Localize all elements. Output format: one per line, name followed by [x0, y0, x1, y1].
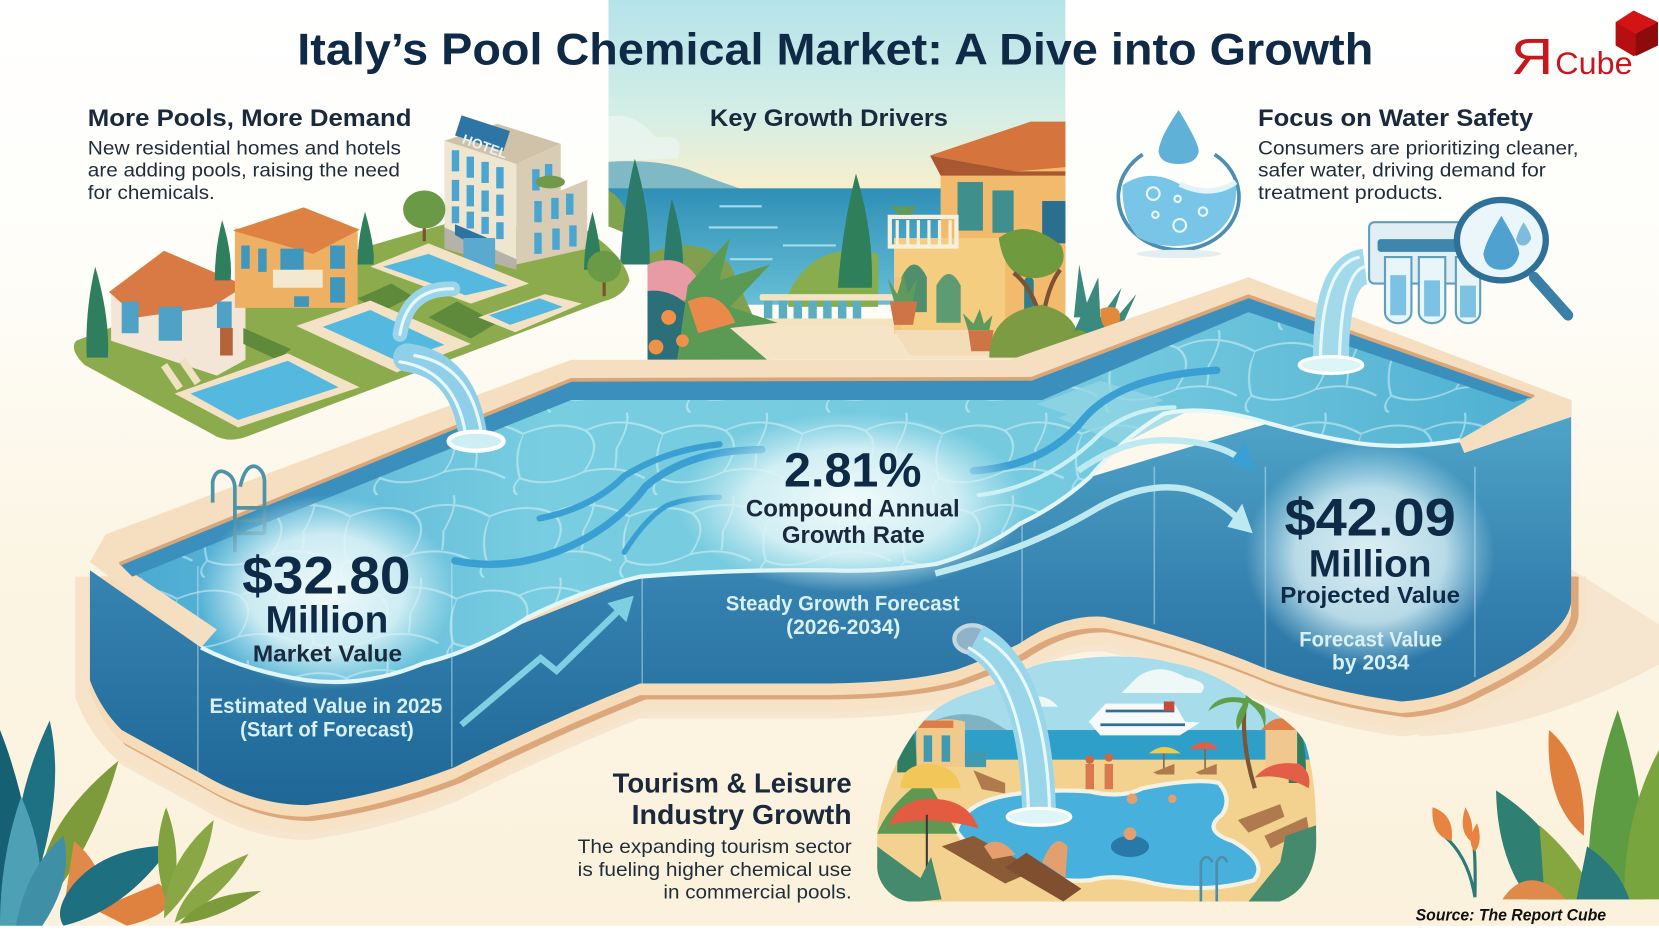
- white footer band: [0, 926, 1659, 937]
- hotel: [444, 115, 587, 270]
- waterfall: garden to pool: [400, 289, 504, 451]
- round trees: [403, 190, 621, 296]
- icon: pool ladder: [213, 466, 265, 552]
- illustration: residential and hotel pools: [74, 115, 630, 440]
- garden pools copings: [175, 243, 582, 427]
- glow: projected value: [1245, 444, 1495, 667]
- text block: more pools, more demand: New residential homes and hotels: [88, 138, 401, 159]
- logo: RCube: R: [1511, 28, 1553, 85]
- panel: pool: [90, 277, 1576, 819]
- text block: focus on water safety: Consumers are prioritizing cleaner,: [1258, 138, 1579, 159]
- stat: market value 2025: (Start of Forecast): [240, 718, 414, 741]
- pool inner edge: [120, 296, 1534, 564]
- pool steps: [1037, 381, 1185, 444]
- stat: projected value 2034: [1280, 488, 1460, 675]
- logo: RCube: Cube: [1555, 45, 1633, 81]
- icon: cypress trees left: [620, 159, 683, 277]
- text block: more pools, more demand: More Pools, More Demand: [88, 105, 412, 132]
- stat: market value 2025: $32.80: [242, 547, 411, 606]
- balustrade: [758, 294, 897, 326]
- hotel: HOTEL: [460, 132, 509, 162]
- stat: CAGR: Compound Annual: [746, 495, 960, 522]
- text block: tourism and leisure: is fueling higher chemical use: [578, 860, 852, 881]
- glow: market value: [197, 495, 455, 690]
- stat: market value 2025: Estimated Value in 2025: [209, 695, 442, 718]
- stat: CAGR: Growth Rate: [782, 522, 925, 549]
- pool caustics: [120, 296, 1534, 682]
- pool water surface: [120, 296, 1534, 682]
- white villa: [109, 251, 245, 376]
- heading: key growth drivers: Key Growth Drivers: [710, 105, 948, 132]
- garden pools water: [190, 254, 563, 420]
- stat: CAGR: 2.81%: [784, 444, 922, 498]
- illustration: tourism resort: [873, 625, 1323, 908]
- text block: tourism and leisure: Industry Growth: [632, 799, 852, 830]
- stat: market value 2025: Market Value: [253, 640, 402, 666]
- pool outer rim lower: [75, 576, 1586, 821]
- pool right coping strip: [1459, 397, 1571, 453]
- stat: projected value 2034: Projected Value: [1280, 582, 1460, 608]
- stat: projected value 2034: Million: [1309, 544, 1432, 586]
- stat: CAGR: Steady Growth Forecast: [726, 592, 960, 615]
- hedges: [243, 284, 497, 360]
- garden foliage left of terrace: [648, 238, 778, 360]
- trees: [86, 212, 601, 358]
- sun loungers: [164, 360, 198, 388]
- text block: tourism and leisure: in commercial pools.: [663, 882, 852, 903]
- illustration: water safety droplet: [1118, 110, 1239, 258]
- stat: projected value 2034: $42.09: [1284, 488, 1456, 547]
- pool front edge: [201, 411, 1460, 682]
- icon: cypress tree centre: [838, 174, 872, 288]
- stat: market value 2025: Million: [266, 600, 388, 642]
- stat: projected value 2034: Forecast Value: [1299, 628, 1442, 651]
- arrow: lower flow: [935, 487, 1253, 573]
- pool wall: [90, 400, 1571, 805]
- stat: CAGR: (2026-2034): [786, 616, 900, 639]
- panel: key growth drivers scene: [608, 0, 1136, 360]
- plants: bottom left: [0, 721, 261, 926]
- plants: bottom right: [1432, 710, 1659, 899]
- pool coping: [90, 277, 1571, 648]
- waterfall: pool to resort: [954, 625, 1071, 825]
- text block: focus on water safety: treatment products.: [1258, 183, 1443, 204]
- text block: focus on water safety: [1258, 105, 1579, 204]
- source note: Source: The Report Cube: [1416, 906, 1606, 924]
- text block: more pools, more demand: are adding pools, raising the need: [88, 161, 400, 182]
- title: Italy’s Pool Chemical Market: A Dive into Growth: [297, 26, 1373, 75]
- stat: market value 2025: [209, 547, 442, 741]
- text block: tourism and leisure: [578, 767, 852, 903]
- stat: projected value 2034: by 2034: [1332, 652, 1410, 675]
- text block: tourism and leisure: The expanding tourism sector: [578, 837, 852, 858]
- pool far wall band: [120, 296, 1534, 577]
- text block: focus on water safety: safer water, driving demand for: [1258, 161, 1547, 182]
- pool wall dividers: [198, 467, 1475, 773]
- flow streams: [455, 370, 1217, 564]
- text block: tourism and leisure: Tourism & Leisure: [613, 767, 852, 798]
- villa: [888, 122, 1065, 356]
- orange villa: [233, 207, 360, 308]
- waterfall: filter to pool: [1299, 257, 1365, 373]
- garden base: [74, 224, 630, 440]
- text block: focus on water safety: Focus on Water Safety: [1258, 105, 1534, 132]
- stat: CAGR: [726, 444, 960, 639]
- arrow: upper flow: [1078, 440, 1256, 471]
- text block: more pools, more demand: for chemicals.: [88, 183, 215, 204]
- arrow: growth trend: [461, 596, 634, 725]
- illustration: water filter with magnifier: [1369, 200, 1568, 323]
- glow: CAGR: [677, 413, 1026, 593]
- tree and foliage beside villa: [989, 229, 1136, 358]
- logo: RCube: [1511, 11, 1658, 85]
- panel: soft pool shadow: [90, 564, 1659, 840]
- text block: more pools, more demand: [88, 105, 412, 204]
